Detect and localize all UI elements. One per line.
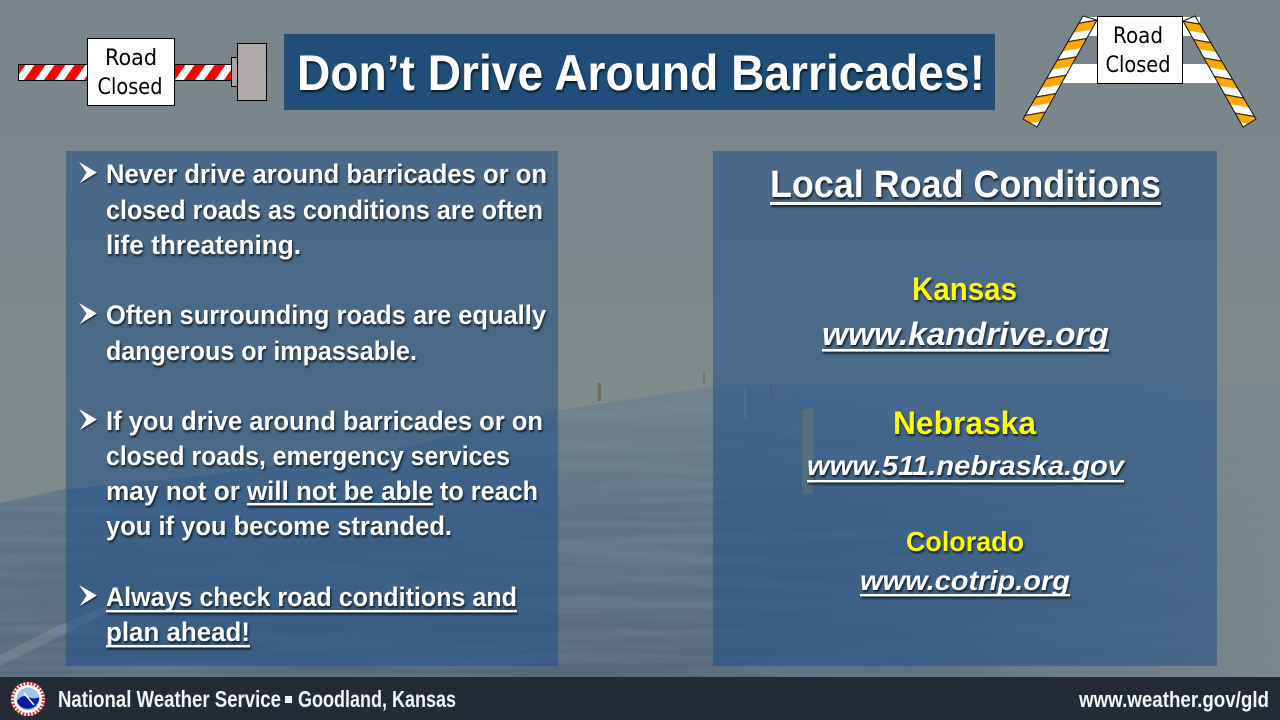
bullet 3 text: If you drive around barricades or on bbox=[106, 406, 543, 436]
background: blizzard road photo bbox=[0, 372, 1180, 677]
Nebraska link: www.511.nebraska.gov bbox=[807, 450, 1125, 481]
icon: road closed gate barrier bbox=[18, 38, 266, 106]
title: Don’t Drive Around Barricades! bbox=[297, 45, 985, 101]
bullet 4 text bbox=[106, 582, 517, 647]
roadside marker posts bbox=[744, 382, 813, 494]
bullet 1 text bbox=[106, 159, 547, 260]
Colorado link: www.cotrip.org bbox=[860, 565, 1070, 596]
bullet 2 text: dangerous or impassable. bbox=[106, 336, 417, 366]
icon: NWS seal bbox=[11, 682, 45, 716]
bullet 2 text: Often surrounding roads are equally bbox=[106, 300, 546, 330]
bullet 4 arrow bbox=[79, 585, 97, 606]
Kansas link: www.kandrive.org bbox=[822, 316, 1109, 352]
bullet 3 text: may not or bbox=[106, 476, 240, 506]
bullet 4 text: plan ahead! bbox=[106, 617, 250, 647]
footer organisation text: Goodland, Kansas bbox=[298, 686, 456, 712]
Nebraska state label: Nebraska bbox=[893, 405, 1036, 441]
bullet 4 text: Always check road conditions and bbox=[106, 582, 517, 612]
footer organisation text: National Weather Service bbox=[58, 686, 281, 712]
bullet 3 text: will not be able bbox=[246, 476, 433, 506]
bullet 3 arrow bbox=[79, 409, 97, 430]
footer organisation text bbox=[58, 686, 456, 712]
bullet 1 text: life threatening. bbox=[106, 230, 301, 260]
icon: road closed A-frame barricade: Road bbox=[1113, 24, 1163, 49]
bullet 1 text: closed roads as conditions are often bbox=[106, 195, 543, 225]
icon: road closed gate barrier: Road bbox=[105, 46, 157, 71]
panel heading: Local Road Conditions bbox=[770, 164, 1161, 206]
bullet 1 arrow bbox=[79, 162, 97, 183]
footer bar bbox=[0, 677, 1280, 720]
title banner bbox=[284, 34, 995, 110]
bullet 3 text: to reach bbox=[440, 476, 538, 506]
bullet 1 text: Never drive around barricades or on bbox=[106, 159, 547, 189]
icon: road closed A-frame barricade bbox=[1023, 16, 1256, 127]
bullet 3 text bbox=[106, 406, 543, 541]
bullet 2 arrow bbox=[79, 303, 97, 324]
icon: road closed gate barrier: Closed bbox=[98, 75, 162, 100]
panel: safety advice bbox=[66, 151, 558, 666]
bullet 3 text: you if you become stranded. bbox=[106, 511, 452, 541]
Kansas state label: Kansas bbox=[912, 271, 1017, 307]
Colorado state label: Colorado bbox=[906, 526, 1024, 557]
bullet 2 text bbox=[106, 300, 546, 366]
bullet 3 text: closed roads, emergency services bbox=[106, 441, 510, 471]
panel: local road conditions bbox=[713, 151, 1217, 666]
icon: road closed A-frame barricade: Closed bbox=[1106, 53, 1170, 78]
